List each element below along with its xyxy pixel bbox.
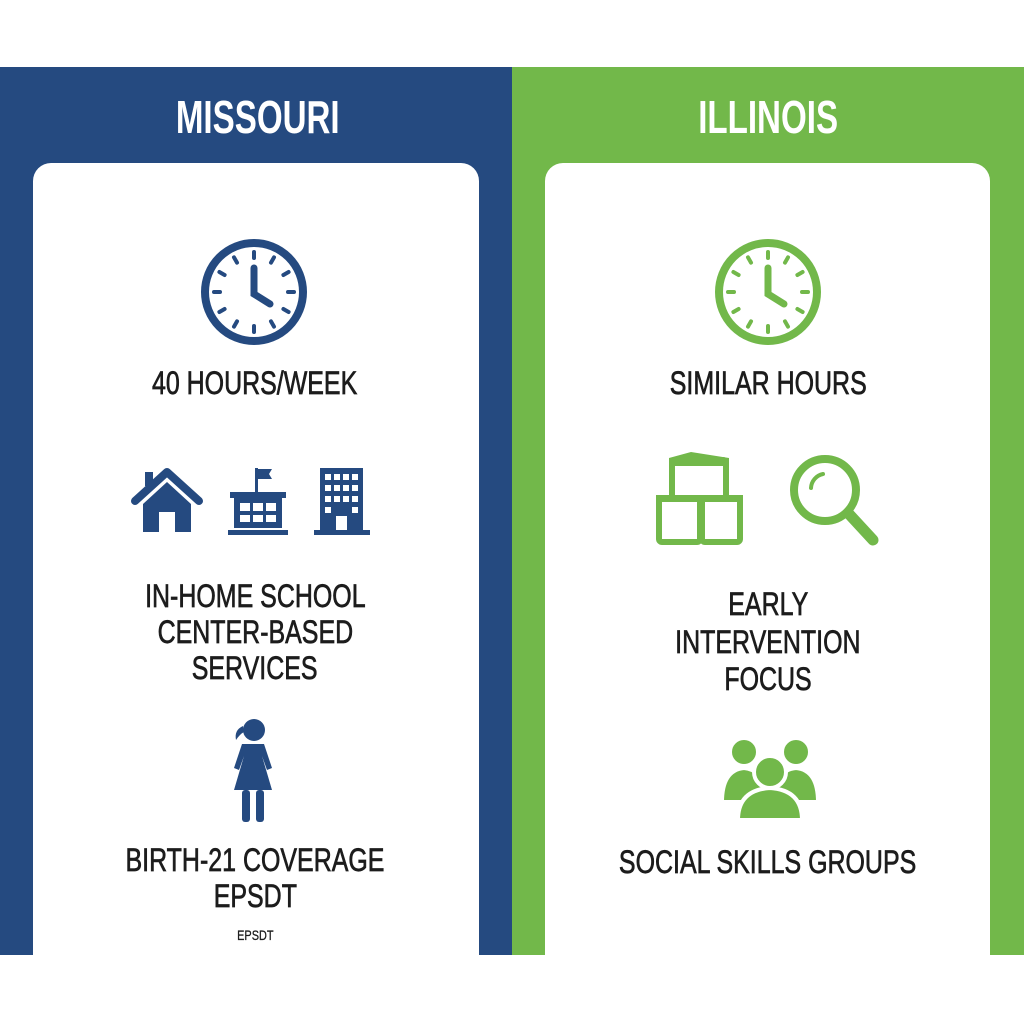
text: services [145, 578, 366, 686]
icon: school [228, 468, 288, 535]
icon: magnifier [790, 455, 878, 546]
text: epsdt small: EPSDT [237, 927, 273, 943]
icon: people [724, 740, 816, 818]
text: early intervention [675, 586, 861, 697]
heading: illinois: ILLINOIS [698, 91, 838, 143]
card: missouri [33, 163, 479, 955]
icon: house [131, 468, 203, 532]
text: services: CENTER-BASED [157, 614, 353, 650]
panel: illinois [512, 67, 1024, 955]
icon: clock green [715, 239, 821, 345]
icon: building [314, 468, 370, 535]
text: 40 hours: 40 HOURS/WEEK [152, 365, 358, 401]
text: early intervention: FOCUS [724, 661, 812, 697]
icon: clock blue [201, 239, 307, 345]
icon: girl [234, 719, 272, 822]
text: social skills: SOCIAL SKILLS GROUPS [619, 844, 917, 880]
text: coverage: BIRTH-21 COVERAGE [126, 842, 384, 878]
text: coverage: EPSDT [213, 878, 297, 914]
heading: missouri: MISSOURI [176, 91, 340, 143]
panel: missouri [0, 67, 512, 955]
text: similar hours: SIMILAR HOURS [670, 365, 866, 401]
text: services: IN-HOME SCHOOL [145, 578, 365, 614]
text: coverage [126, 842, 384, 914]
text: early intervention: EARLY [728, 586, 808, 622]
icon: blocks [656, 452, 743, 545]
card: illinois [545, 163, 990, 955]
text: early intervention: INTERVENTION [675, 624, 861, 660]
text: services: SERVICES [192, 650, 318, 686]
